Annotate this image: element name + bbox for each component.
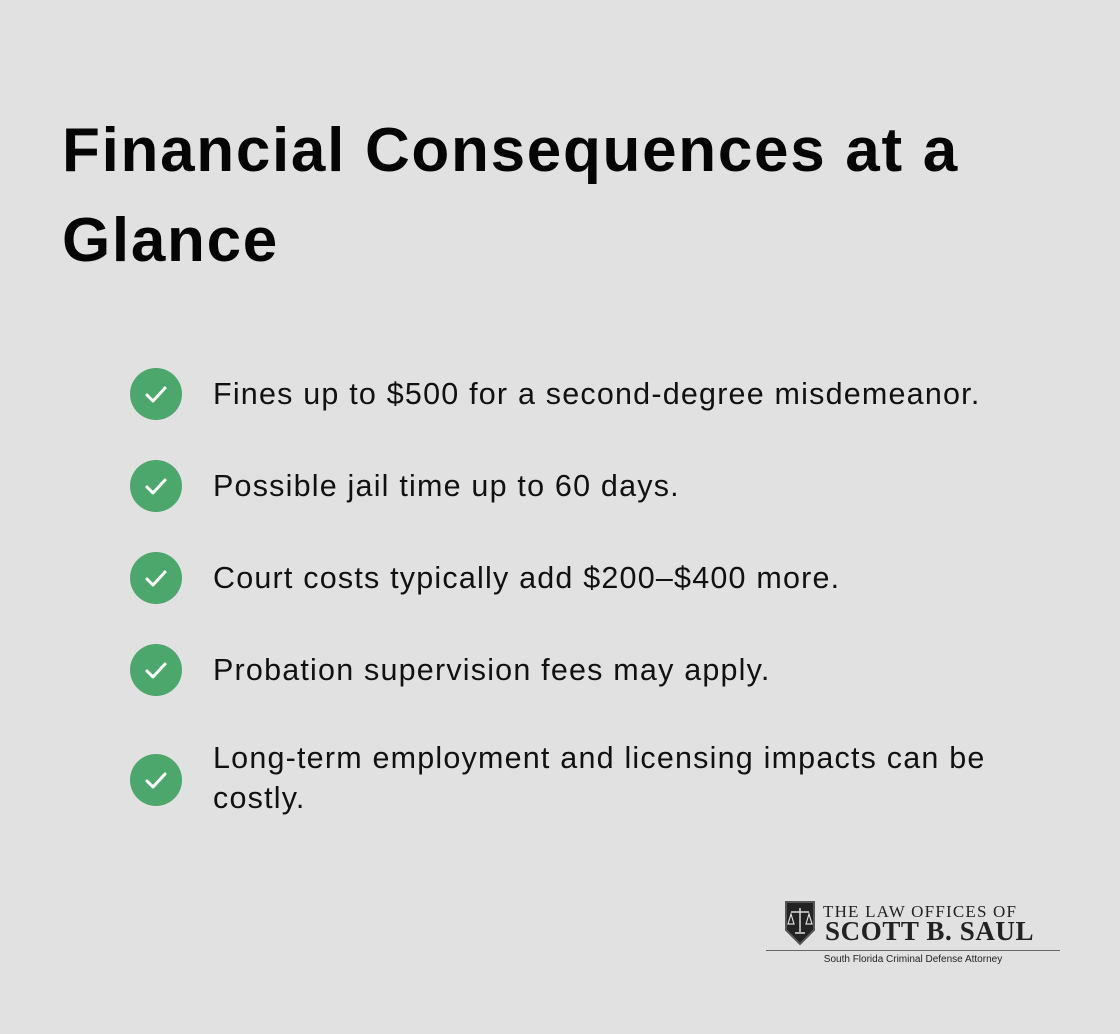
text: Possible jail time up to 60 days. (213, 469, 680, 503)
item 5 (130, 741, 986, 815)
icon: check (130, 552, 182, 604)
icon: check (130, 754, 182, 806)
logo text: THE LAW OFFICES OF (823, 902, 1017, 921)
text: costly. (213, 781, 306, 815)
icon: shield with scales (785, 901, 815, 946)
item 3 (130, 552, 840, 604)
text: Court costs typically add $200–$400 more. (213, 561, 840, 595)
logo: SCOTT B. SAUL (825, 916, 1034, 946)
icon: check (130, 460, 182, 512)
text: Fines up to $500 for a second-degree misdemeanor. (213, 377, 981, 411)
icon: check (130, 644, 182, 696)
item 2 (130, 460, 680, 512)
tagline: South Florida Criminal Defense Attorney (824, 954, 1002, 965)
item 4 (130, 644, 771, 696)
text: Probation supervision fees may apply. (213, 653, 771, 687)
title (62, 116, 959, 275)
icon: check (130, 368, 182, 420)
item 1 (130, 368, 981, 420)
text: Long-term employment and licensing impacts can be (213, 741, 986, 775)
title: Glance (62, 206, 279, 275)
logo (766, 901, 1060, 965)
text (213, 741, 986, 815)
title: Financial Consequences at a (62, 116, 959, 185)
